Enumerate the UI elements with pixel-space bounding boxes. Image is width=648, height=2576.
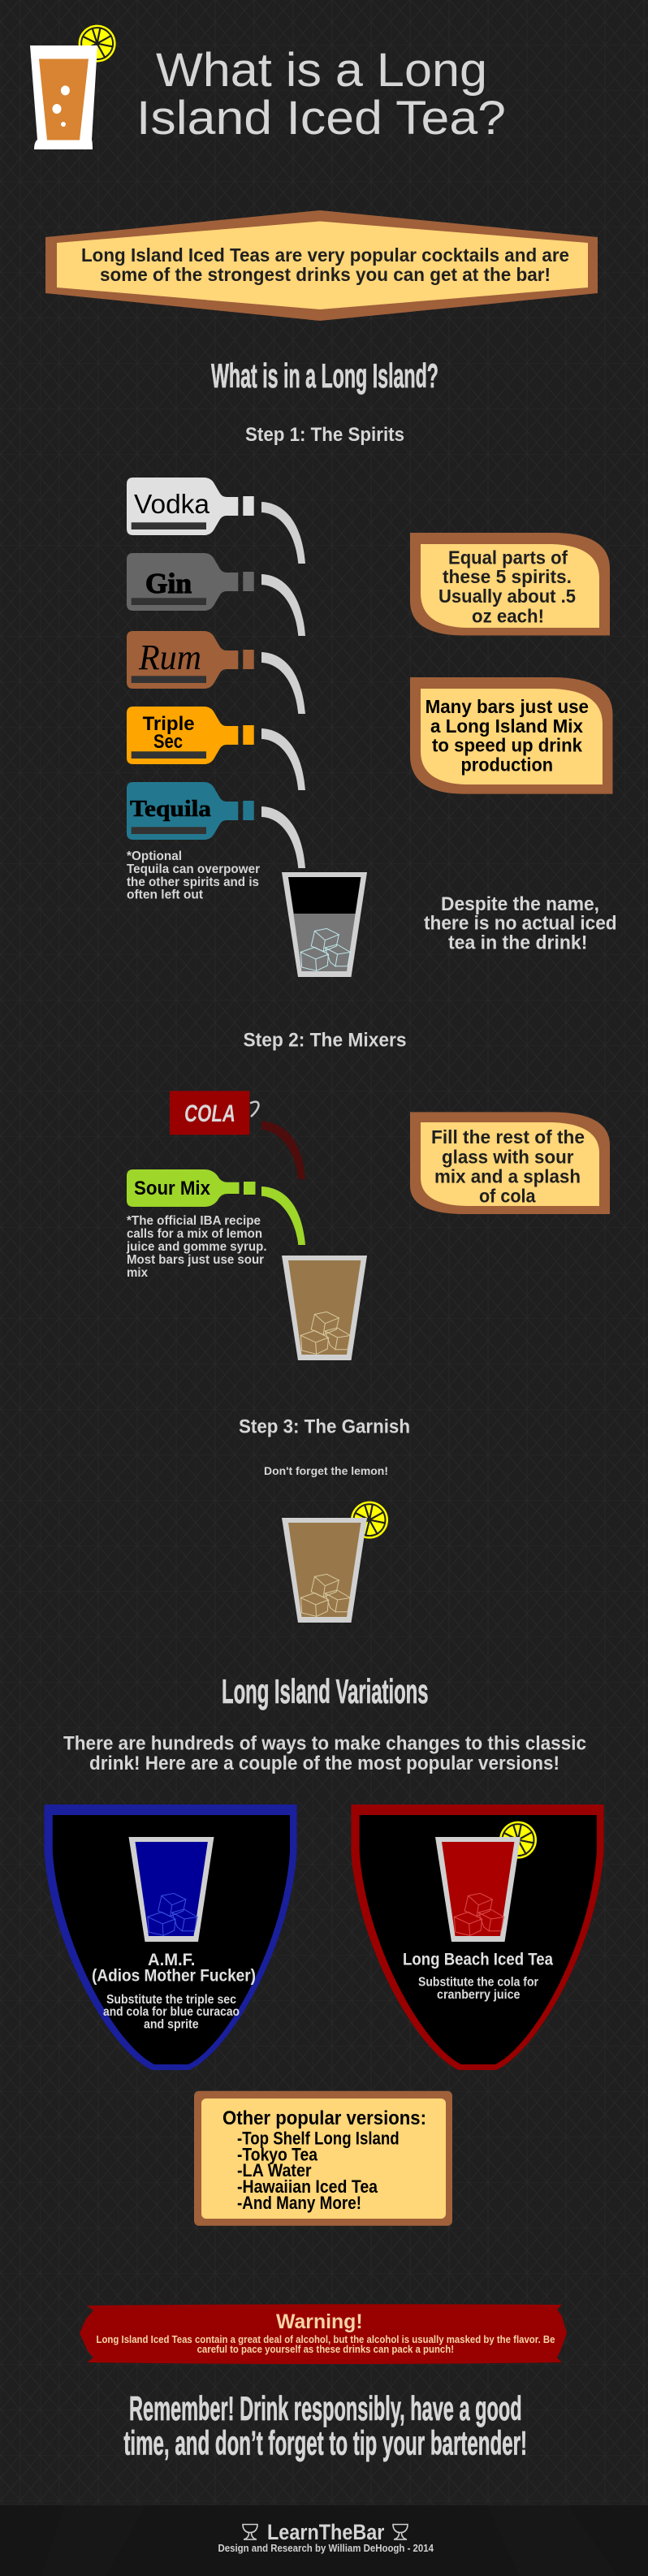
icon: goblet left xyxy=(243,2524,257,2539)
text: don't forget the lemon: Don't forget the lemon! xyxy=(264,1464,388,1477)
panel: A.M.F. shield: Substitute the triple sec xyxy=(106,1993,236,2007)
bottle: gin xyxy=(127,553,305,636)
bottle: sour mix xyxy=(127,1169,305,1245)
heading: step 2: Step 2: The Mixers xyxy=(244,1030,406,1051)
panel: other popular versions: -Hawaiian Iced Tea xyxy=(237,2176,378,2197)
panel: intro banner: some of the strongest drinks you can get at the bar! xyxy=(100,264,551,285)
footnote: IBA recipe: mix xyxy=(127,1266,148,1280)
bottle: vodka: Vodka xyxy=(134,489,210,519)
footnote: tequila optional: Tequila can overpower xyxy=(127,862,260,876)
panel: other popular versions: -And Many More! xyxy=(237,2193,361,2213)
panel: warning banner xyxy=(80,2304,567,2364)
footnote: IBA recipe xyxy=(126,1214,266,1280)
callout: long island mix: production xyxy=(461,754,553,775)
panel: other popular versions: -Tokyo Tea xyxy=(237,2144,318,2164)
bottle: cola: COLA xyxy=(184,1100,235,1127)
title: Island Iced Tea? xyxy=(136,92,506,145)
text: remember closing message xyxy=(123,2389,527,2462)
callout: long island mix xyxy=(410,677,612,794)
footnote: IBA recipe: calls for a mix of lemon xyxy=(127,1227,262,1241)
callout: fill the rest: Fill the rest of the xyxy=(431,1126,585,1148)
panel: warning banner: careful to pace yourself as these drinks can pack a punch! xyxy=(197,2344,454,2355)
bottle: cola xyxy=(170,1091,305,1179)
callout: equal parts: these 5 spirits. xyxy=(443,566,572,587)
panel: other popular versions: -Top Shelf Long Island xyxy=(237,2128,400,2148)
footnote: tequila optional: the other spirits and is xyxy=(127,875,259,889)
footnote: IBA recipe: juice and gomme syrup. xyxy=(126,1240,266,1254)
callout: long island mix: Many bars just use xyxy=(426,696,589,717)
heading: step 3: Step 3: The Garnish xyxy=(239,1416,410,1437)
bottle: tequila xyxy=(127,782,305,868)
panel: intro banner xyxy=(45,210,598,321)
bottle: sour mix: Sour Mix xyxy=(134,1178,211,1199)
footer xyxy=(0,2505,648,2576)
title xyxy=(136,44,506,145)
panel: other popular versions: -LA Water xyxy=(237,2160,312,2181)
bottle: triple sec: Sec xyxy=(153,731,183,753)
footer: Design and Research by William DeHoogh - 2014 xyxy=(218,2542,434,2554)
footer: LearnTheBar xyxy=(267,2520,385,2544)
header xyxy=(30,25,506,149)
callout: fill the rest: of cola xyxy=(479,1185,536,1206)
callout: equal parts: Equal parts of xyxy=(448,547,568,568)
callout: equal parts: Usually about .5 xyxy=(438,586,576,607)
icon: glass with spirits xyxy=(282,872,367,977)
text: despite the name: there is no actual iced xyxy=(424,913,617,935)
callout: equal parts: oz each! xyxy=(472,605,544,626)
callout: equal parts xyxy=(410,533,610,635)
text: despite the name: tea in the drink! xyxy=(448,932,587,953)
footnote: IBA recipe: *The official IBA recipe xyxy=(127,1214,261,1228)
panel: warning banner: Long Island Iced Teas contain a great deal of alcohol, but the alcohol is usually masked by the flavor. Be xyxy=(96,2334,555,2345)
bottle: rum: Rum xyxy=(138,638,201,677)
icon: red glass xyxy=(435,1837,521,1942)
panel: intro banner: Long Island Iced Teas are very popular cocktails and are xyxy=(81,244,569,266)
text: despite the name: Despite the name, xyxy=(441,893,599,915)
footnote: tequila optional xyxy=(127,849,260,901)
bottle: tequila: Tequila xyxy=(130,797,211,822)
bottle: rum xyxy=(127,631,305,714)
icon: finished glass with lemon xyxy=(282,1502,388,1623)
title: What is a Long xyxy=(156,44,487,97)
text: variations intro xyxy=(63,1733,586,1774)
text: variations intro: There are hundreds of ways to make changes to this classic xyxy=(63,1733,586,1755)
panel: warning banner: Warning! xyxy=(276,2310,363,2333)
panel: Long Beach shield: cranberry juice xyxy=(437,1988,521,2002)
icon: glass with mixers xyxy=(282,1256,367,1360)
callout: fill the rest: glass with sour xyxy=(442,1146,573,1167)
text: variations intro: drink! Here are a couple of the most popular versions! xyxy=(89,1753,559,1774)
panel: other popular versions: Other popular versions: xyxy=(222,2107,426,2129)
panel: Long Beach shield: Substitute the cola for xyxy=(418,1976,538,1990)
text: despite the name xyxy=(424,893,617,953)
heading: step 1: Step 1: The Spirits xyxy=(245,424,404,446)
panel: Long Beach shield: Long Beach Iced Tea xyxy=(403,1951,553,1969)
heading: variations: Long Island Variations xyxy=(222,1672,429,1710)
footnote: tequila optional: *Optional xyxy=(127,849,182,863)
panel: A.M.F. shield: (Adios Mother Fucker) xyxy=(92,1967,256,1985)
bottle: triple sec: Triple xyxy=(143,713,195,735)
bottle: triple sec xyxy=(127,707,305,790)
panel: A.M.F. shield: and cola for blue curacao xyxy=(103,2005,240,2019)
icon: goblet right xyxy=(393,2524,408,2539)
panel: other popular versions xyxy=(194,2091,452,2226)
bottle: vodka xyxy=(127,478,305,564)
icon: cocktail glass with lemon xyxy=(30,25,116,149)
icon: blue glass xyxy=(128,1837,214,1942)
callout: long island mix: a Long Island Mix xyxy=(430,715,583,737)
callout: fill the rest: mix and a splash xyxy=(434,1166,581,1187)
footnote: tequila optional: often left out xyxy=(127,888,204,901)
panel: A.M.F. shield: and sprite xyxy=(144,2017,199,2031)
panel: A.M.F. shield: A.M.F. xyxy=(148,1951,195,1969)
panel: A.M.F. shield xyxy=(44,1804,297,2070)
callout: fill the rest xyxy=(410,1112,610,1214)
footnote: IBA recipe: Most bars just use sour xyxy=(127,1253,264,1267)
panel: Long Beach shield xyxy=(351,1804,604,2070)
heading: what is in a long island: What is in a Long Island? xyxy=(211,357,438,395)
bottle: gin: Gin xyxy=(145,568,192,599)
callout: long island mix: to speed up drink xyxy=(432,735,582,756)
